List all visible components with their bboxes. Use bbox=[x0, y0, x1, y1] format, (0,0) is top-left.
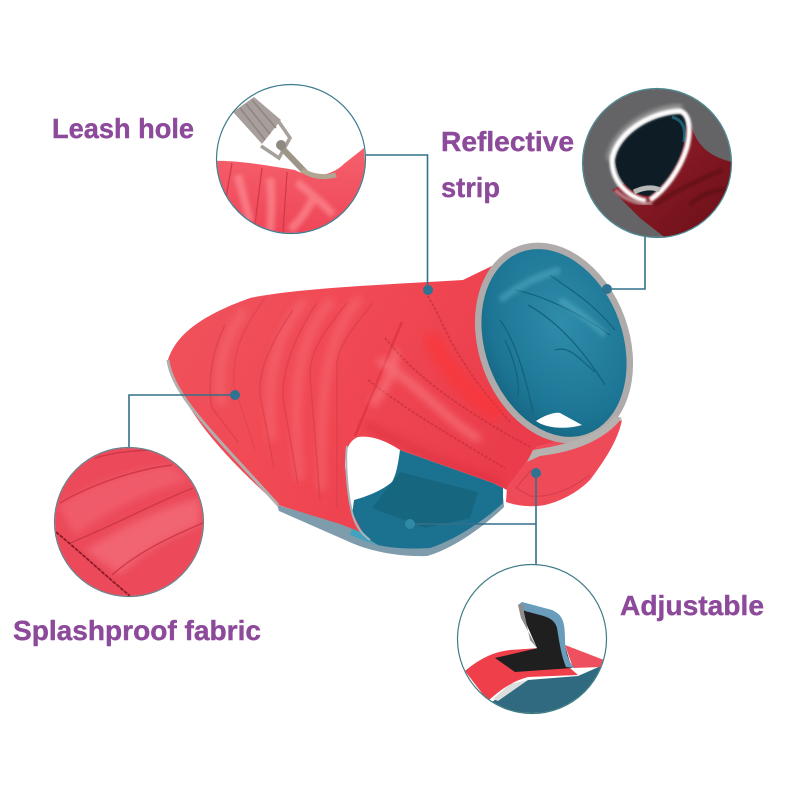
jacket product illustration bbox=[168, 224, 656, 556]
dark seam bbox=[56, 532, 130, 596]
dark opening bbox=[615, 114, 686, 196]
connector: adjustable bbox=[405, 468, 541, 565]
metal swivel bbox=[280, 146, 305, 172]
velcro flap base bbox=[495, 648, 572, 672]
grey hem trim bbox=[168, 360, 278, 505]
label: Splashproof fabric: Splashproof fabric bbox=[13, 615, 261, 646]
inner white gap bbox=[493, 680, 528, 701]
connector: leash hole bbox=[365, 155, 433, 295]
armhole trim bbox=[346, 446, 370, 540]
reflective collar ring bbox=[452, 224, 656, 462]
connector lines and dots bbox=[129, 155, 645, 565]
leash webbing bbox=[233, 97, 281, 144]
red chest flap bbox=[506, 420, 622, 506]
folded flap with velcro bbox=[518, 605, 572, 668]
quilted bands bbox=[60, 466, 185, 532]
metal buckle bbox=[261, 122, 290, 158]
metal snap hook bbox=[302, 170, 336, 177]
connector: splashproof fabric bbox=[129, 390, 240, 448]
label: Adjustable: Adjustable bbox=[620, 590, 764, 621]
label: Reflective strip bbox=[441, 126, 574, 203]
label: Reflective strip: Reflective bbox=[441, 126, 574, 157]
bottom strap trim bbox=[277, 496, 504, 556]
lower collar white gap bbox=[536, 413, 582, 428]
lower collar bbox=[615, 190, 652, 203]
detail circle: reflective strip bbox=[582, 88, 733, 240]
lining creases bbox=[500, 275, 615, 412]
label: Leash hole: Leash hole bbox=[52, 113, 194, 144]
red quilted body bbox=[168, 258, 560, 533]
reflective glow bbox=[612, 111, 689, 201]
flap stitching bbox=[516, 470, 590, 496]
teal lining bbox=[492, 666, 601, 713]
flap grey tip bbox=[518, 604, 537, 648]
inner fold bbox=[634, 188, 660, 192]
quilting and shine bbox=[210, 292, 530, 507]
belly strap edge bbox=[350, 522, 385, 549]
flap teal edge bbox=[518, 602, 574, 668]
lining highlight bbox=[500, 270, 605, 335]
reflective collar band bbox=[527, 416, 622, 462]
detail circle: adjustable bbox=[458, 564, 610, 720]
opening teal edge bbox=[672, 117, 685, 142]
detail circle: splashproof fabric bbox=[54, 448, 205, 598]
red body strip bbox=[465, 648, 578, 701]
red jacket fabric bbox=[217, 148, 365, 233]
red right fabric bbox=[565, 645, 604, 668]
detail circle: leash hole bbox=[214, 84, 370, 240]
neck opening lining bbox=[453, 226, 655, 460]
label: Reflective strip: strip bbox=[441, 172, 500, 203]
teal belly lining bbox=[352, 450, 503, 549]
belly panel bbox=[372, 472, 478, 528]
dark red fabric bbox=[612, 122, 732, 240]
connector: reflective strip bbox=[602, 236, 645, 294]
